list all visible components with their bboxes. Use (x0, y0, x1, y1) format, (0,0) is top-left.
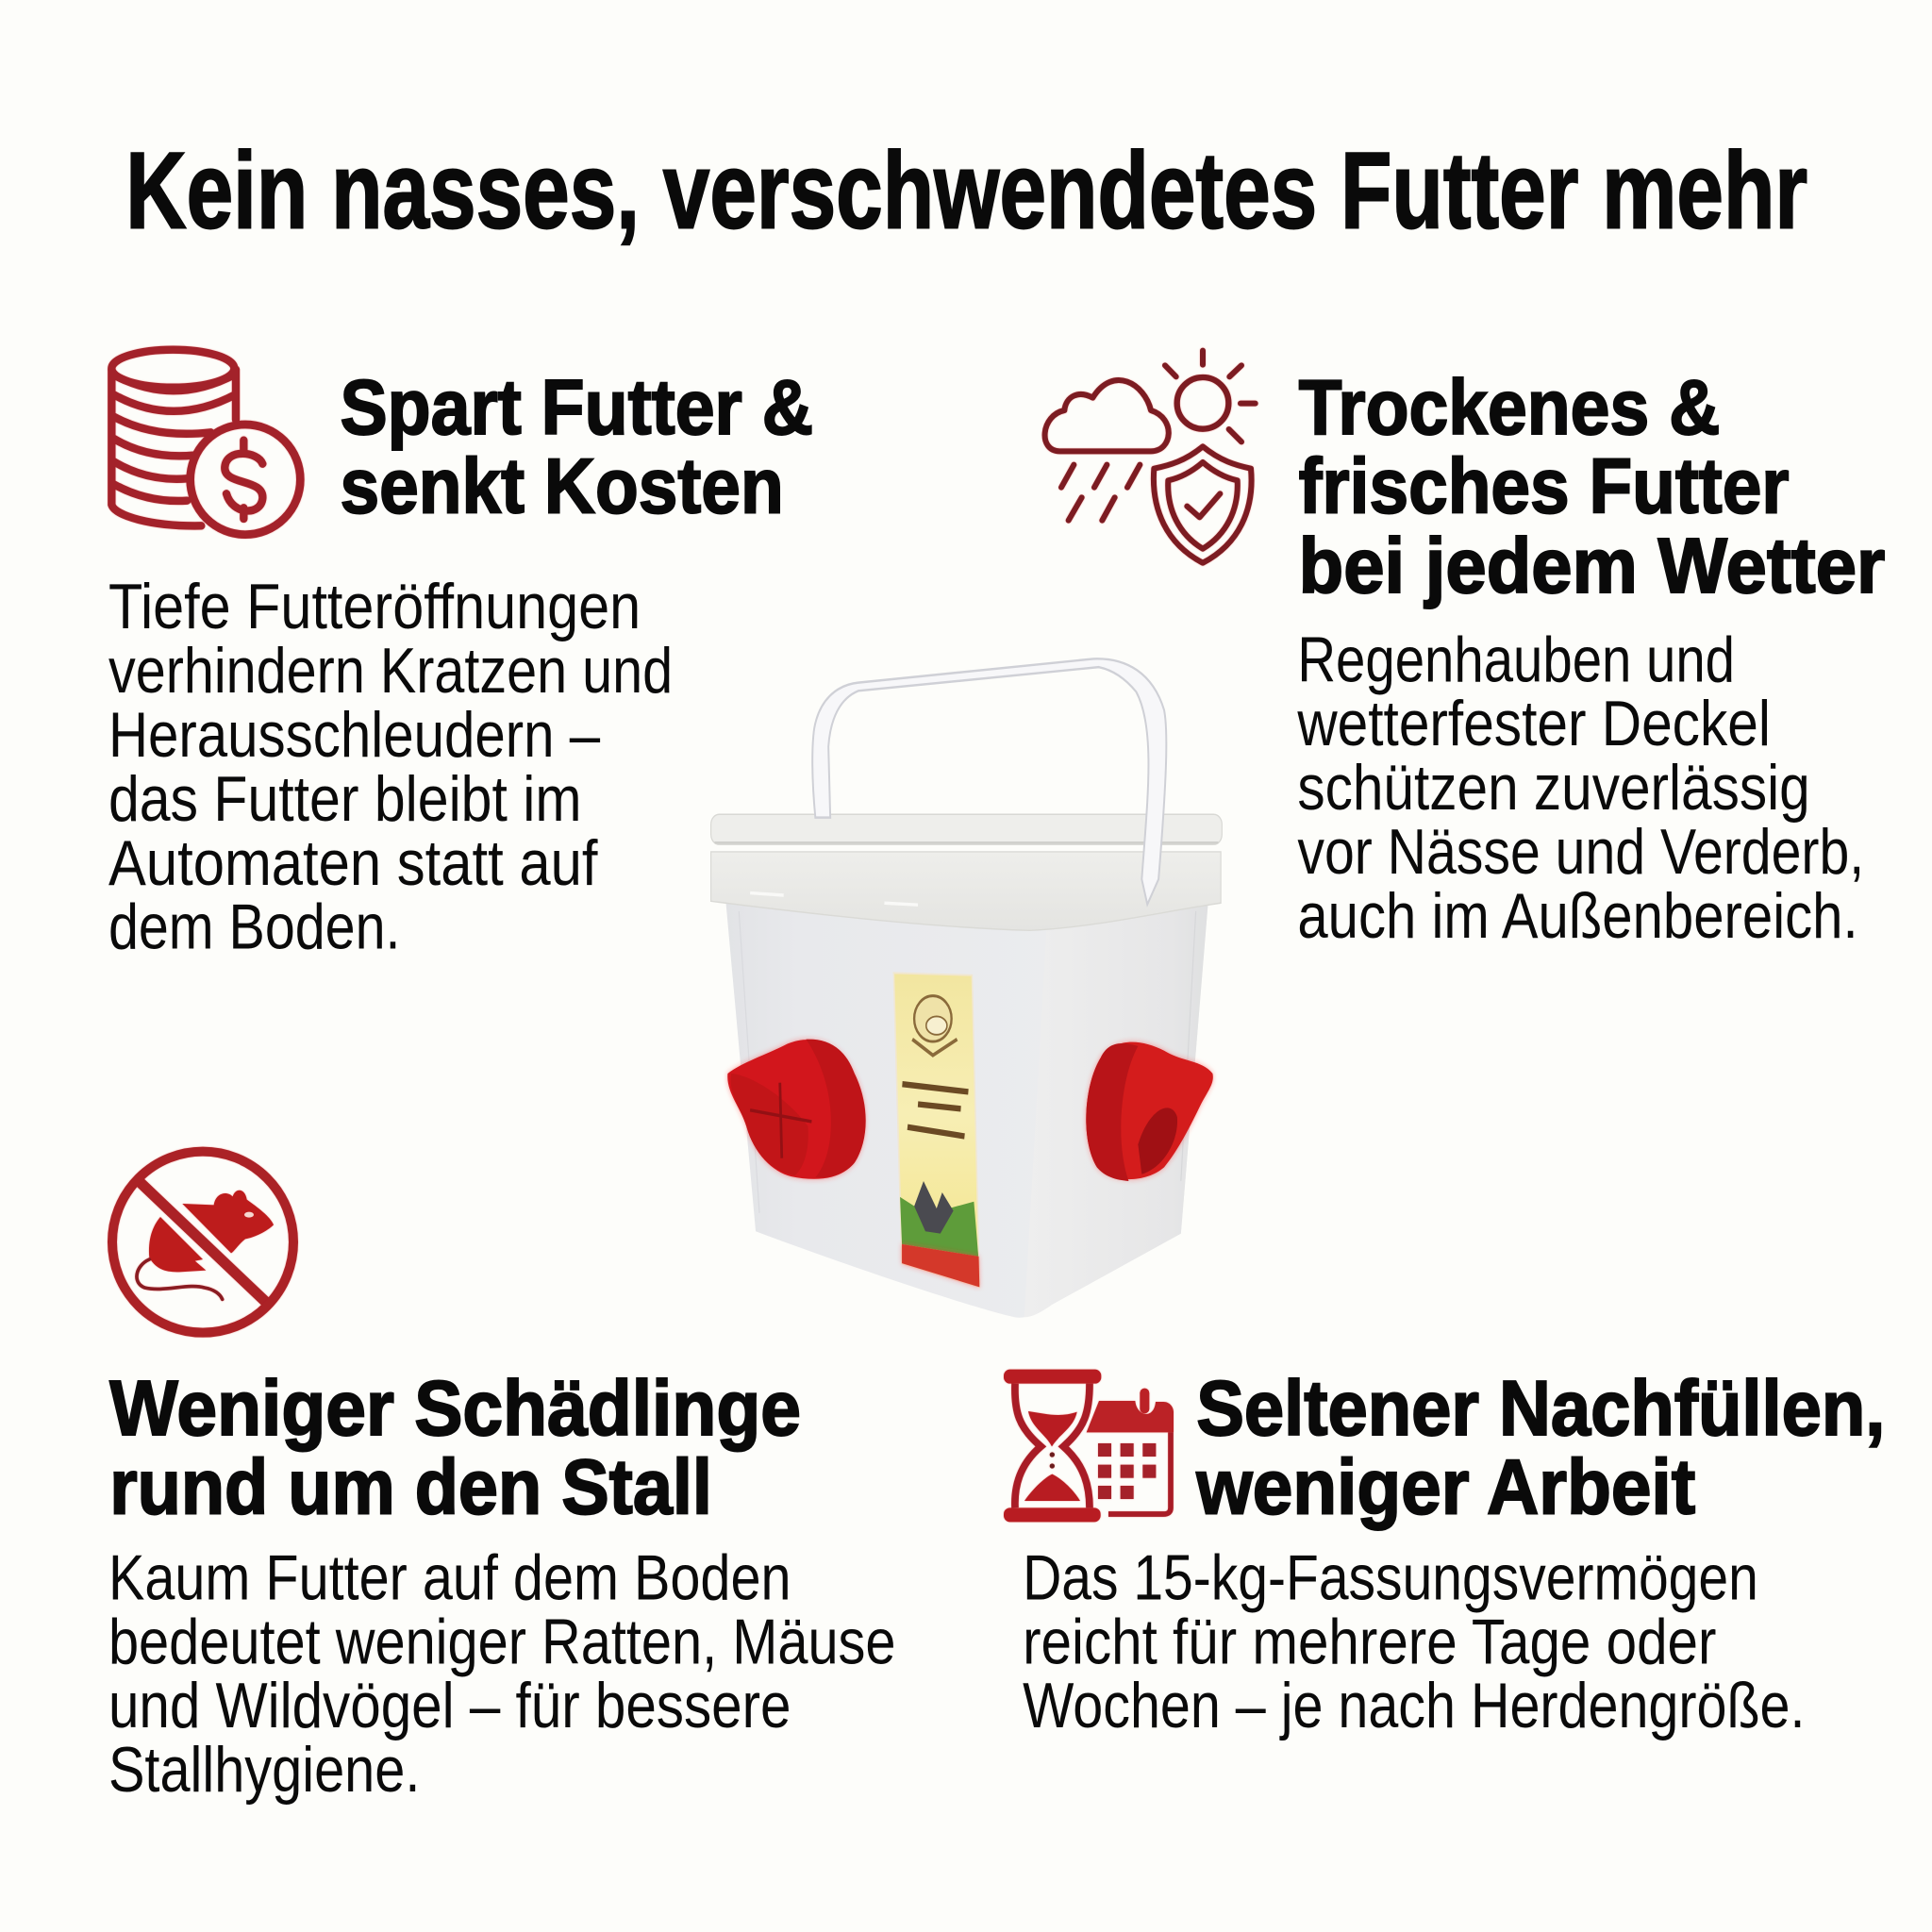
text block: Wochen – je nach Herdengröße. (1023, 1671, 1805, 1741)
panel: saves feed (108, 350, 813, 963)
heading: frisches Futter (1299, 443, 1789, 529)
heading (1299, 365, 1885, 609)
icon: crossed-out rat (112, 1152, 293, 1333)
heading: rund um den Stall (109, 1445, 712, 1531)
text block: bedeutet weniger Ratten, Mäuse (108, 1607, 896, 1677)
text block: Tiefe Futteröffnungen (108, 572, 641, 642)
text block: Automaten statt auf (108, 828, 598, 899)
icon: hourglass and calendar (1004, 1370, 1174, 1522)
text block (108, 572, 673, 963)
text block: reicht für mehrere Tage oder (1023, 1607, 1716, 1677)
text block: wetterfester Deckel (1296, 689, 1771, 759)
panel: dry feed in all weather (1045, 351, 1885, 952)
panel: fewer pests (108, 1152, 896, 1806)
panel: less refilling (1004, 1366, 1885, 1741)
text block (108, 1542, 896, 1806)
product image: red feeder bucket (710, 658, 1223, 1318)
icon: cloud, sun and shield (1045, 351, 1256, 563)
text block: Kaum Futter auf dem Boden (108, 1542, 791, 1613)
heading: weniger Arbeit (1195, 1445, 1695, 1531)
text block: Regenhauben und (1297, 625, 1735, 695)
heading (109, 1366, 801, 1531)
text block: und Wildvögel – für bessere (108, 1671, 791, 1741)
text block: das Futter bleibt im (108, 764, 581, 835)
text block (1023, 1542, 1805, 1741)
heading: senkt Kosten (340, 443, 784, 529)
heading: Seltener Nachfüllen, (1196, 1366, 1885, 1452)
heading: bei jedem Wetter (1299, 524, 1885, 609)
heading: Trockenes & (1299, 365, 1720, 451)
text block: Das 15-kg-Fassungsvermögen (1023, 1542, 1758, 1613)
text block: verhindern Kratzen und (108, 636, 673, 707)
heading: Weniger Schädlinge (109, 1366, 801, 1452)
heading (1195, 1366, 1885, 1531)
text block: schützen zuverlässig (1297, 753, 1810, 824)
text block: Herausschleudern – (108, 700, 600, 771)
heading (340, 365, 813, 529)
icon: coin stack with dollar (111, 350, 300, 535)
heading: Spart Futter & (340, 365, 813, 451)
text block: Stallhygiene. (108, 1735, 420, 1806)
text block: dem Boden. (108, 892, 400, 963)
text block (1296, 625, 1864, 952)
